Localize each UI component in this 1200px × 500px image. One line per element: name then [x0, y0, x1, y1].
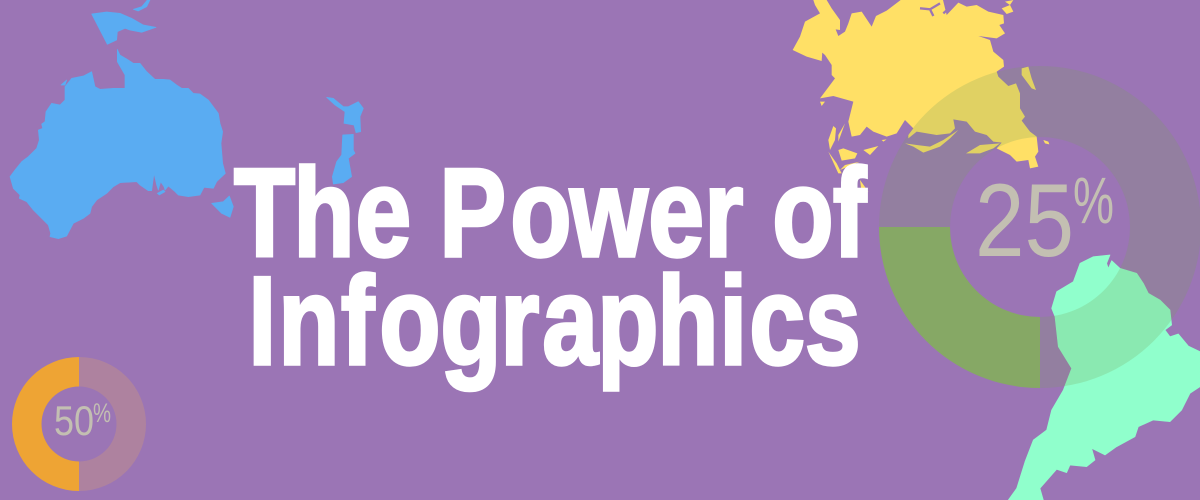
- donut 25% segment: [879, 227, 1040, 388]
- donut remainder ring: [879, 66, 1200, 388]
- title: [234, 144, 867, 391]
- title: Infographics: [248, 252, 861, 391]
- large donut value: 25: [975, 163, 1074, 279]
- map: Oceania: [10, 0, 363, 239]
- title: The Power of: [234, 144, 867, 283]
- small donut value: 50: [54, 397, 94, 444]
- small donut filled half: [12, 357, 79, 491]
- large donut chart: 25%: [879, 66, 1200, 388]
- small donut value: %: [93, 398, 111, 428]
- small donut remainder: [79, 357, 146, 491]
- map: South America: [1008, 255, 1200, 500]
- map: Asia: [793, 0, 1049, 193]
- large donut value: %: [1073, 163, 1114, 237]
- small donut chart: 50%: [12, 357, 146, 491]
